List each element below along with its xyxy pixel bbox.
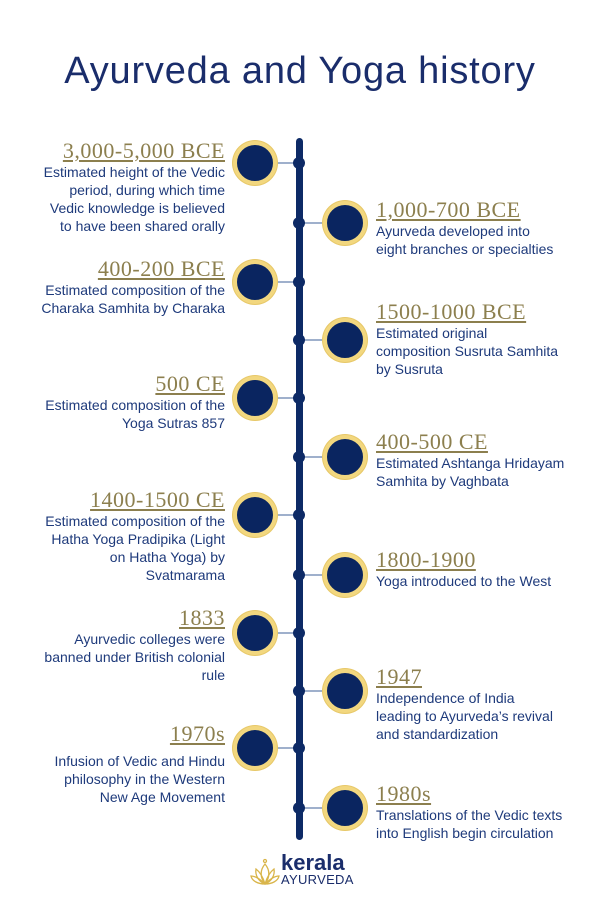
node: 3000-5000 BCE: [232, 140, 305, 186]
node: 1400-1500 CE: [232, 492, 305, 538]
text: 500 CE: 500 CE: [155, 371, 225, 396]
text: 1400-1500 CE: 1400-1500 CE: [90, 487, 225, 512]
text: 1500-1000 BCE: 1500-1000 BCE: [376, 299, 526, 324]
title: Ayurveda and Yoga history: [64, 50, 536, 92]
text: 1500-1000 BCE: by Susruta: [376, 361, 443, 377]
text: 1000-700 BCE: Ayurveda developed into: [376, 223, 530, 239]
text: 1970s: Infusion of Vedic and Hindu: [55, 753, 225, 769]
icon: lotus: [250, 858, 280, 885]
text: 1980s: Translations of the Vedic texts: [376, 807, 562, 823]
text: 1970s: philosophy in the Western: [64, 771, 225, 787]
text: 1947: and standardization: [376, 726, 498, 742]
logo: [250, 850, 354, 887]
node: 400-200 BCE: [232, 259, 305, 305]
text: 1500-1000 BCE: composition Susruta Samhita: [376, 343, 558, 359]
text: 1000-700 BCE: [376, 197, 553, 257]
text: 1947: 1947: [376, 664, 422, 689]
text: 400-200 BCE: 400-200 BCE: [98, 256, 225, 281]
node: 1833: [232, 610, 305, 656]
node: 1947: [293, 668, 368, 714]
text: 400-500 CE: 400-500 CE: [376, 429, 488, 454]
text: 400-500 CE: Samhita by Vaghbata: [376, 473, 509, 489]
text: 1947: Independence of India: [376, 690, 515, 706]
text: 1947: leading to Ayurveda’s revival: [376, 708, 553, 724]
text: 3000-5000 BCE: [44, 138, 225, 234]
text: 1833: rule: [202, 667, 225, 683]
logo: kerala: [281, 850, 345, 875]
text: 3000-5000 BCE: Estimated height of the Vedic: [44, 164, 225, 180]
text: 1833: [44, 605, 225, 683]
text: 1980s: into English begin circulation: [376, 825, 553, 841]
text: 3000-5000 BCE: period, during which time: [69, 182, 225, 198]
text: 400-200 BCE: Charaka Samhita by Charaka: [41, 300, 225, 316]
text: 3000-5000 BCE: 3,000-5,000 BCE: [63, 138, 225, 163]
text: 1833: Ayurvedic colleges were: [74, 631, 225, 647]
text: 1400-1500 CE: on Hatha Yoga) by: [110, 549, 225, 565]
text: 1400-1500 CE: Estimated composition of the: [45, 513, 225, 529]
text: 1800-1900: Yoga introduced to the West: [376, 573, 551, 589]
text: 400-200 BCE: [41, 256, 226, 316]
text: 500 CE: Estimated composition of the: [45, 397, 225, 413]
text: 3000-5000 BCE: to have been shared orally: [60, 218, 225, 234]
text: 1833: 1833: [179, 605, 225, 630]
text: 500 CE: Yoga Sutras 857: [122, 415, 225, 431]
node: 1800-1900: [293, 552, 368, 598]
text: 400-500 CE: Estimated Ashtanga Hridayam: [376, 455, 564, 471]
node: 1000-700 BCE: [293, 200, 368, 246]
text: 1800-1900: [376, 547, 552, 589]
node: 1500-1000 BCE: [293, 317, 368, 363]
text: 1980s: 1980s: [376, 781, 431, 806]
text: 1400-1500 CE: Svatmarama: [146, 567, 225, 583]
text: 400-200 BCE: Estimated composition of the: [45, 282, 225, 298]
text: 1970s: 1970s: [170, 721, 225, 746]
text: 3000-5000 BCE: Vedic knowledge is believed: [50, 200, 225, 216]
text: 500 CE: [45, 371, 225, 431]
node: 1980s: [293, 785, 368, 831]
text: 1833: banned under British colonial: [44, 649, 225, 665]
node: 400-500 CE: [293, 434, 368, 480]
text: 1980s: [376, 781, 562, 841]
text: 1970s: New Age Movement: [100, 789, 225, 805]
text: 1500-1000 BCE: Estimated original: [376, 325, 487, 341]
text: 400-500 CE: [376, 429, 564, 489]
text: 1500-1000 BCE: [376, 299, 558, 377]
text: 1000-700 BCE: 1,000-700 BCE: [376, 197, 521, 222]
timeline line: [296, 138, 303, 840]
node: 1970s: [232, 725, 305, 771]
text: 1400-1500 CE: [45, 487, 226, 583]
text: 1400-1500 CE: Hatha Yoga Pradipika (Light: [51, 531, 225, 547]
logo: AYURVEDA: [281, 872, 354, 887]
text: 1970s: [55, 721, 225, 805]
text: 1800-1900: 1800-1900: [376, 547, 476, 572]
text: 1947: [376, 664, 553, 742]
node: 500 CE: [232, 375, 305, 421]
text: 1000-700 BCE: eight branches or specialties: [376, 241, 553, 257]
